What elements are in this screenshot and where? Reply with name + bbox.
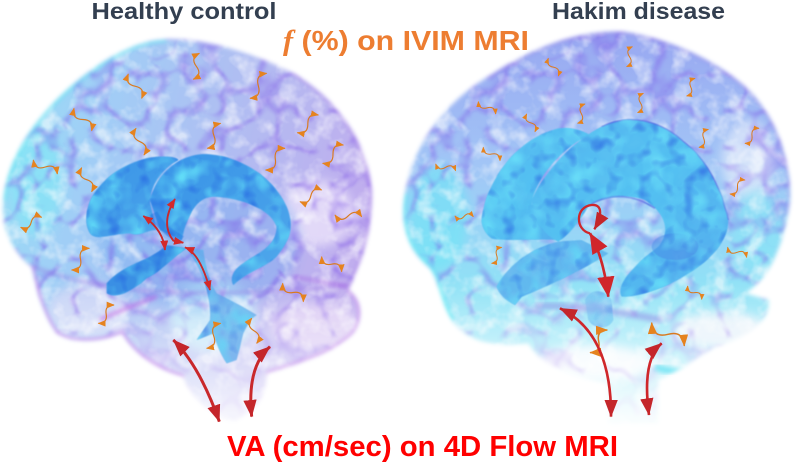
- wavy arrow 13: [455, 214, 473, 219]
- wavy arrow 20: [249, 318, 259, 343]
- wavy arrow 12: [300, 189, 322, 203]
- wavy arrow 14: [492, 247, 502, 263]
- wavy arrow 14: [335, 212, 362, 219]
- caption: perfusion fraction on IVIM MRI: f (%) on IVIM MRI: [283, 25, 529, 57]
- wavy arrow 9: [699, 129, 708, 147]
- wavy arrow 12: [730, 180, 745, 194]
- wavy arrow 2: [548, 58, 559, 76]
- wavy arrow 6: [578, 104, 585, 123]
- red flow arrows: healthy control: [143, 199, 270, 422]
- red flow arrows: Hakim disease: [560, 205, 662, 417]
- wavy arrow 5: [134, 128, 146, 155]
- caption: VA on 4D Flow MRI: VA (cm/sec) on 4D Flow MRI: [227, 431, 618, 463]
- wavy arrow 4: [478, 102, 496, 114]
- wavy arrow 8: [266, 148, 285, 170]
- panel: Hakim disease brain: [395, 27, 795, 430]
- wavy arrow 1: [193, 53, 199, 79]
- wavy arrow 1: [627, 47, 632, 67]
- flow arrow: aqueduct bidirectional: [590, 233, 608, 297]
- flow arrow: ventricle upward: [167, 199, 183, 243]
- flow arrow: swirling ventricular flow: [579, 205, 600, 233]
- flow arrow: left vertebral artery: [173, 340, 219, 422]
- wavy arrow 3: [687, 78, 695, 96]
- wavy arrow 9: [323, 145, 343, 164]
- wavy arrow 15: [728, 247, 747, 257]
- wavy arrow 13: [21, 216, 42, 228]
- flow arrow: right vertebral artery: [647, 343, 662, 415]
- wavy arrow 6: [207, 123, 221, 148]
- wavy arrows: perfusion fraction, healthy control: [21, 53, 362, 348]
- wavy arrow 2: [127, 74, 143, 98]
- ventricles: healthy control: [86, 154, 291, 363]
- flow arrow: aqueduct: [185, 247, 210, 290]
- wavy arrow 16: [322, 257, 342, 272]
- wavy arrow 7: [297, 115, 318, 133]
- wavy arrow 11: [436, 164, 456, 171]
- wavy arrow 15: [72, 248, 89, 270]
- wavy arrow 18: [98, 305, 114, 323]
- wavy arrow 10: [33, 160, 57, 174]
- wavy arrow 11: [80, 168, 93, 192]
- large wavy arrow, brainstem: [590, 330, 607, 353]
- flow arrow: left vertebral artery: [560, 308, 611, 417]
- wavy arrow 5: [638, 93, 643, 113]
- wavy arrow 8: [745, 128, 759, 143]
- brain volume: healthy control: [0, 33, 380, 427]
- wavy arrow 4: [74, 108, 92, 131]
- large wavy arrow, right of brainstem: [652, 323, 684, 346]
- brain volume: Hakim disease: [395, 27, 795, 430]
- wavy arrow 16: [688, 286, 702, 299]
- wavy arrow 10: [483, 147, 500, 161]
- wavy arrow 3: [250, 73, 267, 98]
- flow arrow: right vertebral artery: [251, 347, 270, 417]
- flow arrow: ventricle left: [143, 216, 165, 250]
- wavy arrow 7: [526, 114, 536, 132]
- ventricles: Hakim disease: [482, 120, 728, 327]
- wavy arrow 19: [207, 323, 221, 348]
- wavy arrow 17: [283, 283, 303, 302]
- wavy arrows: perfusion fraction, Hakim disease: [436, 47, 759, 353]
- panel: healthy control brain: [0, 33, 380, 427]
